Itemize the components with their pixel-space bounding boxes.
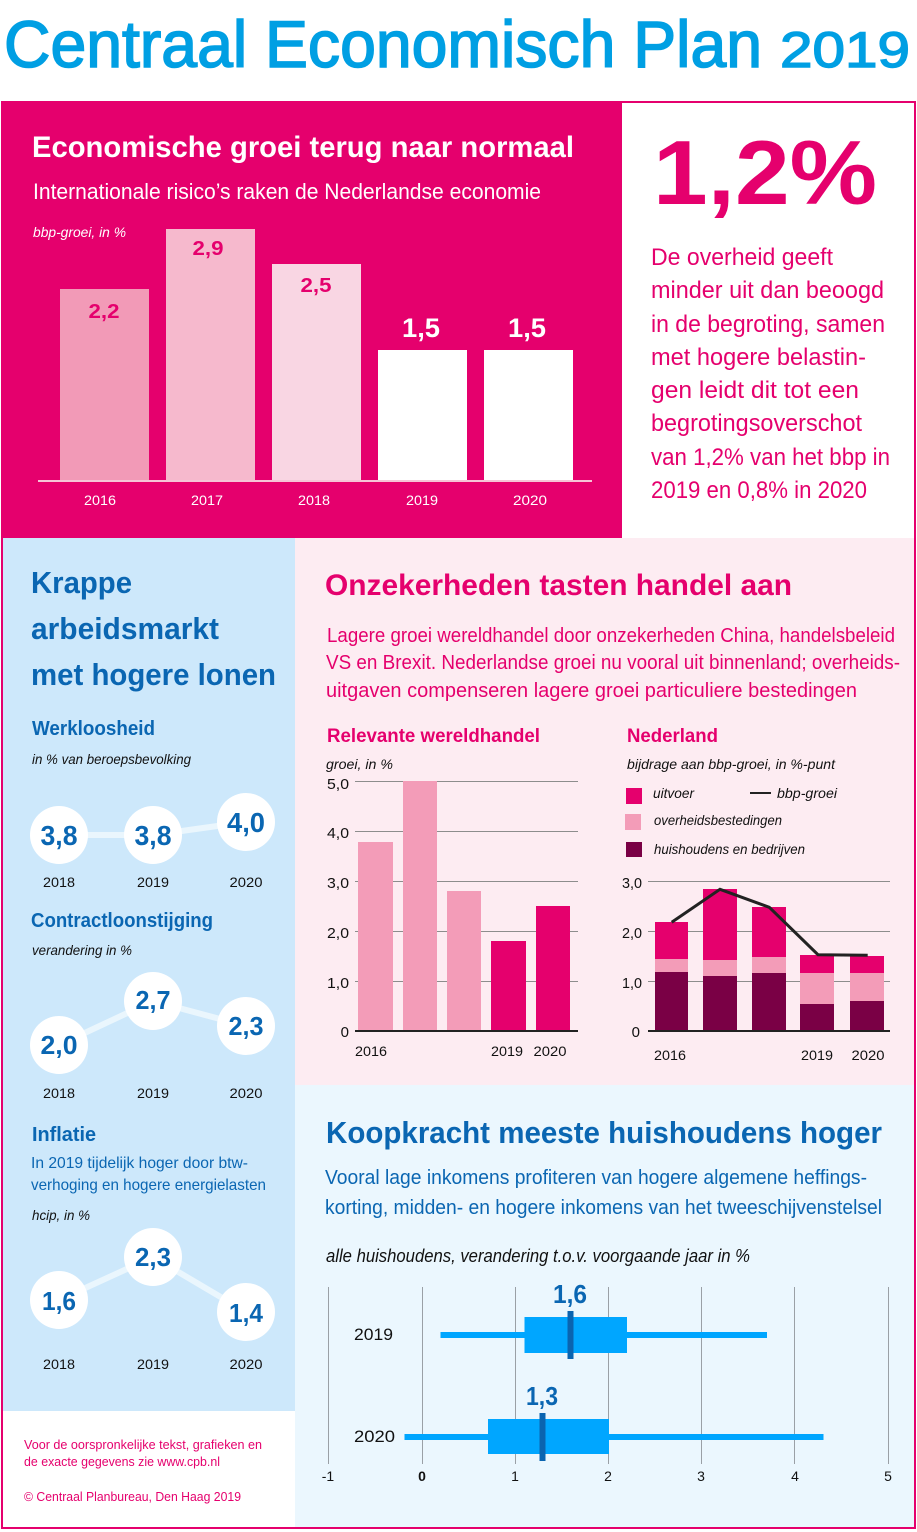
heading: inflatie: Inflatie <box>32 1124 96 1146</box>
chart: inflatie: 1,6 <box>42 1286 76 1316</box>
text block: inflatie: In 2019 tijdelijk hoger door btw- <box>31 1155 248 1172</box>
text block: inflatie <box>31 1155 266 1194</box>
text block: begrotingsoverschot: De overheid geeft <box>651 244 833 271</box>
bar chart: bbp-groei <box>38 229 592 508</box>
chart: werkloosheid: 3,8 <box>134 820 172 851</box>
panel: colofon <box>2 1411 295 1529</box>
box plot: koopkracht: 1,6 <box>553 1279 587 1309</box>
bar chart: bbp-groei: 2,9 <box>192 238 224 260</box>
bar chart: bbp-groei: 1,5 <box>508 313 546 343</box>
bar chart: bbp-groei: 2018 <box>298 492 330 508</box>
text block: inflatie: verhoging en hogere energielasten <box>31 1177 266 1194</box>
chart: inflatie: 2019 <box>137 1356 169 1372</box>
bar chart: wereldhandel: 0 <box>341 1024 349 1041</box>
text block: onzekerheden: VS en Brexit. Nederlandse groei nu vooral uit binnenland; overheids- <box>326 652 900 674</box>
title: Centraal Economisch Plan <box>4 7 762 81</box>
bar chart: wereldhandel: 3,0 <box>327 875 349 892</box>
chart: werkloosheid: 2020 <box>230 874 263 890</box>
heading: krappe arbeidsmarkt <box>31 565 276 692</box>
heading: contractloonstijging: Contractloonstijging <box>31 910 213 932</box>
chart: contractloonstijging: 2018 <box>43 1085 75 1101</box>
box plot: koopkracht: 4 <box>791 1468 799 1484</box>
chart: inflatie: 2020 <box>230 1356 263 1372</box>
heading: economische groei: Economische groei terug naar normaal <box>32 131 574 164</box>
big number: 1,2%: 1,2% <box>653 123 877 224</box>
text block: koopkracht <box>325 1167 882 1219</box>
bar chart: wereldhandel: 2020 <box>534 1043 567 1059</box>
legend <box>625 785 838 857</box>
bar chart: wereldhandel <box>327 776 578 1059</box>
note: contractloon: verandering in % <box>32 942 132 958</box>
legend: bbp-groei <box>777 785 838 801</box>
panel: arbeidsmarkt <box>2 538 295 1411</box>
text block: begrotingsoverschot: begrotingsoverschot <box>651 410 862 437</box>
legend: huishoudens en bedrijven <box>654 841 805 857</box>
box plot: koopkracht <box>322 1279 892 1484</box>
text block: bron: de exacte gegevens zie www.cpb.nl <box>24 1454 220 1469</box>
chart: werkloosheid <box>30 793 275 890</box>
text block: begrotingsoverschot: 2019 en 0,8% in 2020 <box>651 477 867 504</box>
heading: werkloosheid: Werkloosheid <box>32 718 155 740</box>
bar chart: wereldhandel: 5,0 <box>327 776 349 793</box>
text block: begrotingsoverschot <box>651 244 890 504</box>
note: hcip: hcip, in % <box>32 1207 90 1223</box>
chart: werkloosheid: 4,0 <box>227 807 265 838</box>
bar chart: wereldhandel: 2016 <box>355 1043 387 1059</box>
chart: inflatie: 2,3 <box>135 1242 171 1272</box>
stacked bar chart: nederland: 2019 <box>801 1047 833 1063</box>
note: wereldhandel: groei, in % <box>326 756 393 772</box>
stacked bar chart: nederland: 2016 <box>654 1047 686 1063</box>
chart: werkloosheid: 3,8 <box>40 820 78 851</box>
note: alle huishoudens: alle huishoudens, verandering t.o.v. voorgaande jaar in % <box>326 1246 750 1266</box>
text block: begrotingsoverschot: gen leidt dit tot een <box>651 377 859 404</box>
chart: contractloonstijging: 2020 <box>230 1085 263 1101</box>
legend: uitvoer <box>653 785 695 801</box>
heading: krappe arbeidsmarkt: Krappe <box>31 565 132 600</box>
title: 2019 <box>780 22 910 78</box>
stacked bar chart: nederland: 1,0 <box>622 975 642 992</box>
chart: contractloonstijging: 2,7 <box>136 985 170 1015</box>
note: werkloosheid: in % van beroepsbevolking <box>32 751 191 767</box>
panel: onzekerheden handel <box>295 538 915 1085</box>
stacked bar chart: nederland: 0 <box>632 1024 640 1041</box>
bar chart: bbp-groei: 2,5 <box>300 275 332 297</box>
chart: contractloonstijging: 2,3 <box>228 1011 264 1041</box>
bar chart: wereldhandel: 2,0 <box>327 925 349 942</box>
text block: koopkracht: Vooral lage inkomens profiteren van hogere algemene heffings- <box>325 1167 867 1189</box>
stacked bar chart: nederland: 2,0 <box>622 925 642 942</box>
heading: onzekerheden: Onzekerheden tasten handel aan <box>325 569 792 602</box>
stacked bar chart: nederland: 2020 <box>852 1047 885 1063</box>
text block: bron <box>24 1437 262 1469</box>
bar chart: wereldhandel: 2019 <box>491 1043 523 1059</box>
bar chart: bbp-groei: 2016 <box>84 492 116 508</box>
bar chart: bbp-groei: 2017 <box>191 492 223 508</box>
chart: contractloonstijging: 2019 <box>137 1085 169 1101</box>
chart: contractloonstijging: 2,0 <box>40 1030 78 1060</box>
box plot: koopkracht: 2 <box>604 1468 612 1484</box>
panel: koopkracht <box>295 1085 915 1529</box>
box plot: koopkracht: 2019 <box>354 1325 393 1344</box>
text block: begrotingsoverschot: in de begroting, samen <box>651 311 885 338</box>
box plot: koopkracht: 0 <box>418 1468 426 1484</box>
bar chart: wereldhandel: 4,0 <box>327 825 349 842</box>
heading: krappe arbeidsmarkt: met hogere lonen <box>31 657 276 692</box>
heading: krappe arbeidsmarkt: arbeidsmarkt <box>31 611 219 646</box>
text block: onzekerheden: uitgaven compenseren lagere groei particuliere bestedingen <box>326 680 857 702</box>
bar chart: bbp-groei: 2019 <box>406 492 438 508</box>
text block: onzekerheden <box>326 625 900 702</box>
box plot: koopkracht: 1,3 <box>526 1381 558 1411</box>
bar chart: wereldhandel: 1,0 <box>327 975 349 992</box>
stacked bar chart: nederland <box>622 875 890 1063</box>
chart: inflatie: 1,4 <box>229 1298 263 1328</box>
panel: begrotingsoverschot <box>622 102 915 538</box>
box plot: koopkracht: 5 <box>884 1468 892 1484</box>
text block: bron: Voor de oorspronkelijke tekst, grafieken en <box>24 1437 262 1452</box>
panel: economische groei <box>2 102 622 538</box>
box plot: koopkracht: -1 <box>322 1468 334 1484</box>
axis note: bbp-groei: bbp-groei, in % <box>33 224 126 240</box>
subheading: internationale risico's: Internationale risico’s raken de Nederlandse economie <box>33 179 541 204</box>
box plot: koopkracht: 1 <box>511 1468 519 1484</box>
box plot: koopkracht: 3 <box>697 1468 705 1484</box>
chart: inflatie: 2018 <box>43 1356 75 1372</box>
heading: koopkracht: Koopkracht meeste huishoudens hoger <box>326 1115 882 1150</box>
chart: werkloosheid: 2018 <box>43 874 75 890</box>
bar chart: bbp-groei: 2,2 <box>88 301 120 323</box>
box plot: koopkracht: 2020 <box>354 1427 395 1446</box>
text block: begrotingsoverschot: minder uit dan beoogd <box>651 277 884 304</box>
chart: werkloosheid: 2019 <box>137 874 169 890</box>
heading: nederland: Nederland <box>627 726 718 747</box>
text block: copyright: © Centraal Planbureau, Den Haag 2019 <box>24 1489 241 1504</box>
legend: overheidsbestedingen <box>654 812 782 828</box>
bar chart: bbp-groei: 1,5 <box>402 313 440 343</box>
chart: contractloonstijging <box>30 972 275 1101</box>
text block: koopkracht: korting, midden- en hogere inkomens van het tweeschijvenstelsel <box>325 1197 882 1219</box>
text block: begrotingsoverschot: met hogere belastin- <box>651 344 866 371</box>
text block: onzekerheden: Lagere groei wereldhandel door onzekerheden China, handelsbeleid <box>327 625 895 647</box>
bar chart: bbp-groei: 2020 <box>513 492 547 508</box>
note: nederland: bijdrage aan bbp-groei, in %-punt <box>627 756 836 772</box>
chart: inflatie <box>30 1228 275 1372</box>
heading: relevante wereldhandel: Relevante wereldhandel <box>327 726 540 747</box>
stacked bar chart: nederland: 3,0 <box>622 875 642 892</box>
text block: begrotingsoverschot: van 1,2% van het bbp in <box>651 444 890 471</box>
